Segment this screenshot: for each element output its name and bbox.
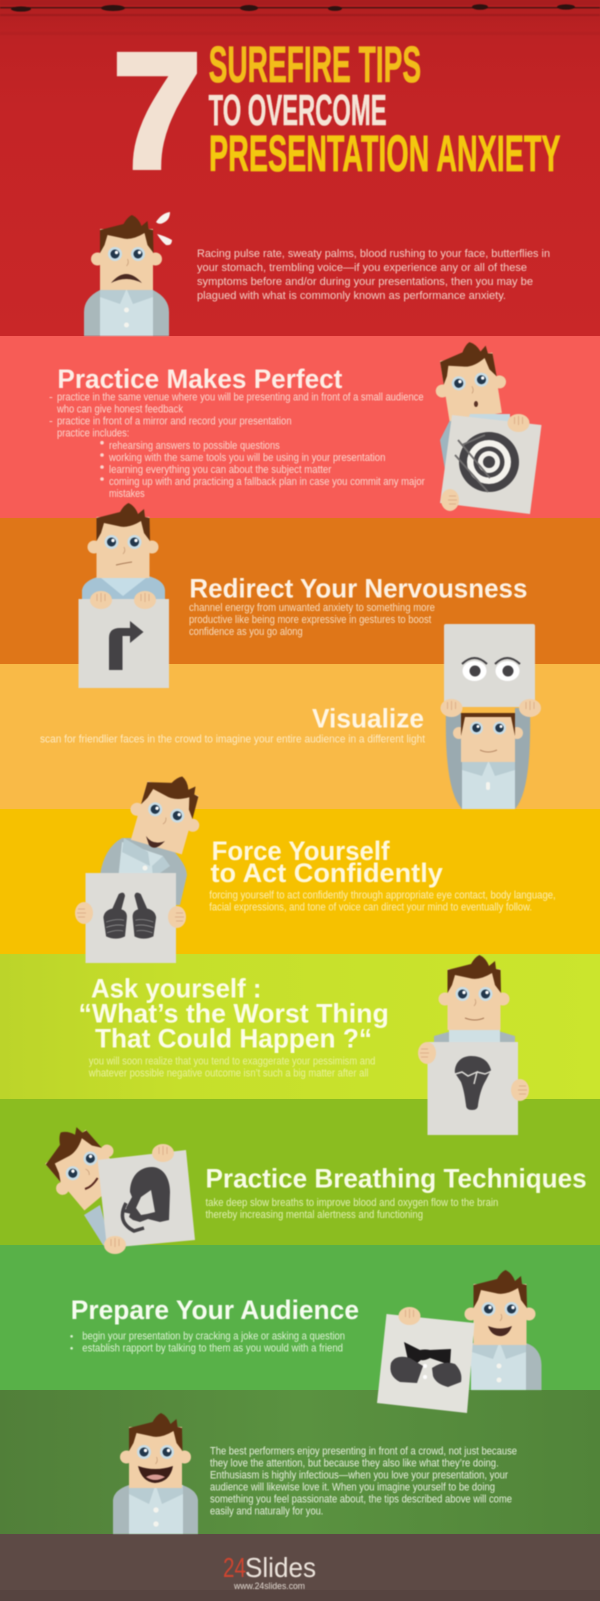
panel: intro background — [0, 0, 600, 336]
icon: bow tie and hands — [390, 1342, 461, 1387]
text block: practice tips — [49, 392, 425, 500]
text block: prepare audience: establish rapport by talking to them as you would with a friend — [82, 1342, 343, 1354]
text block: worst thing — [88, 1056, 375, 1080]
intro text: plagued with what is commonly known as performance anxiety. — [197, 290, 506, 302]
footer wood grain — [0, 1590, 600, 1601]
heading: worst thing: Ask yourself : — [91, 974, 261, 1004]
text block: practice tips: who can give honest feedback — [56, 404, 183, 416]
text block: redirect: confidence as you go along — [189, 626, 303, 638]
conclusion text — [210, 1446, 517, 1518]
title line 1: SUREFIRE TIPS — [209, 36, 421, 93]
heading: visualize: Visualize — [312, 704, 424, 734]
heading: practice breathing: Practice Breathing Techniques — [206, 1164, 587, 1194]
icon: target — [455, 432, 519, 492]
text block: practice tips: working with the same tools you will be using in your presentation — [108, 452, 385, 464]
intro text: your stomach, trembling voice—if you experience any or all of these — [197, 262, 527, 274]
conclusion text: audience will likewise love it. When you imagine yourself to be doing — [210, 1482, 495, 1494]
text block: practice tips: - — [49, 392, 53, 404]
conclusion text: they love the attention, but because they also like what they’re doing. — [210, 1458, 499, 1470]
text block: force yourself — [209, 890, 556, 914]
character: holding eyes card overhead — [440, 624, 541, 809]
icon: turn right arrow — [109, 621, 144, 670]
card with bow tie — [377, 1314, 474, 1413]
text block: practice tips: learning everything you can about the subject matter — [109, 464, 332, 476]
text block: breathing: take deep slow breaths to improve blood and oxygen flow to the brain — [206, 1197, 498, 1209]
text block: visualize: scan for friendlier faces in the crowd to imagine your entire audience in a different light — [40, 734, 426, 746]
heading: worst thing: That Could Happen ?“ — [95, 1024, 372, 1054]
conclusion text: Enthusiasm is highly infectious—when you love your presentation, your — [210, 1470, 508, 1482]
character: happy presenter — [113, 1413, 198, 1534]
panel: footer background — [0, 1534, 600, 1601]
panel: tip 3 background — [0, 664, 600, 809]
intro text — [197, 248, 550, 302]
card with thumbs — [86, 873, 176, 963]
text block: prepare audience — [70, 1330, 345, 1354]
footer logo: Slides — [245, 1552, 316, 1583]
footer logo — [223, 1552, 316, 1592]
character: breathing card — [29, 1113, 195, 1254]
text block: practice tips: practice includes: — [57, 428, 129, 440]
character: thumbs up card — [75, 765, 211, 963]
heading: prepare your audience: Prepare Your Audience — [71, 1295, 359, 1325]
intro text: Racing pulse rate, sweaty palms, blood rushing to your face, butterflies in — [197, 248, 550, 260]
character: broken bulb card — [418, 955, 529, 1135]
character: bow tie card — [377, 1270, 542, 1413]
card with target — [440, 415, 542, 514]
conclusion text: The best performers enjoy presenting in front of a crowd, not just because — [210, 1446, 517, 1458]
text block: redirect — [189, 602, 435, 638]
panel: tip 7 background — [0, 1245, 600, 1390]
panel: tip 2 background — [0, 518, 600, 664]
text block: practice tips: practice in the same venue where you will be presenting and in front of a small audience — [57, 392, 424, 404]
big number 7: 7 — [113, 19, 201, 202]
text block: redirect: channel energy from unwanted anxiety to something more — [189, 602, 435, 614]
panel: tip 1 background — [0, 336, 600, 518]
text block: breathing — [206, 1197, 498, 1221]
icon: broken light bulb — [452, 1056, 494, 1110]
title line 2: TO OVERCOME — [209, 87, 387, 135]
conclusion text: something you feel passionate about, the tips described above will come — [210, 1494, 512, 1506]
icon: thumbs up — [103, 893, 156, 939]
text block: practice tips: coming up with and practicing a fallback plan in case you commit any major — [109, 476, 425, 488]
character: holding target card — [429, 337, 542, 514]
decorative wood nails top — [0, 0, 600, 35]
text block: worst thing: whatever possible negative outcome isn’t such a big matter after all — [88, 1068, 369, 1080]
text block: force yourself: facial expressions, and tone of voice can direct your mind to eventually follow. — [209, 902, 532, 914]
intro text: symptoms before and/or during your presentations, then you may be — [197, 276, 533, 288]
footer logo: 24 — [223, 1552, 246, 1583]
text block: redirect: productive like being more expressive in gestures to boost — [189, 614, 432, 626]
text block: practice tips: rehearsing answers to possible questions — [109, 440, 280, 452]
heading: force yourself — [210, 836, 443, 888]
text block: prepare audience: begin your presentation by cracking a joke or asking a question — [82, 1330, 345, 1342]
panel: tip 6 background — [0, 1099, 600, 1245]
text block: breathing: thereby increasing mental alertness and functioning — [206, 1209, 423, 1221]
icon: breathing head — [122, 1167, 170, 1231]
heading: redirect your nervousness: Redirect Your Nervousness — [189, 574, 527, 604]
heading: force yourself: to Act Confidently — [210, 858, 443, 888]
card with breathing head — [98, 1150, 195, 1248]
footer logo: www.24slides.com — [233, 1581, 305, 1592]
conclusion text: easily and naturally for you. — [210, 1506, 323, 1518]
heading: worst thing — [78, 974, 389, 1054]
card with eyes — [444, 624, 535, 707]
character: worried presenter — [84, 212, 172, 336]
text block: practice tips: practice in front of a mirror and record your presentation — [57, 416, 292, 428]
heading: practice makes perfect: Practice Makes Perfect — [57, 364, 342, 394]
heading: worst thing: “What’s the Worst Thing — [78, 999, 389, 1029]
card with arrow — [78, 599, 169, 688]
panel: tip 4 background — [0, 809, 600, 954]
icon: eyes — [462, 658, 520, 681]
card with bulb — [428, 1042, 518, 1135]
heading: force yourself: Force Yourself — [212, 836, 391, 866]
character: holding arrow card — [78, 503, 169, 688]
panel: conclusion background — [0, 1390, 600, 1534]
panel: tip 5 background — [0, 954, 600, 1099]
title — [113, 19, 560, 202]
text block: practice tips: mistakes — [109, 488, 145, 500]
text block: worst thing: you will soon realize that you tend to exaggerate your pessimism and — [89, 1056, 375, 1068]
text block: practice tips: - — [49, 416, 53, 428]
